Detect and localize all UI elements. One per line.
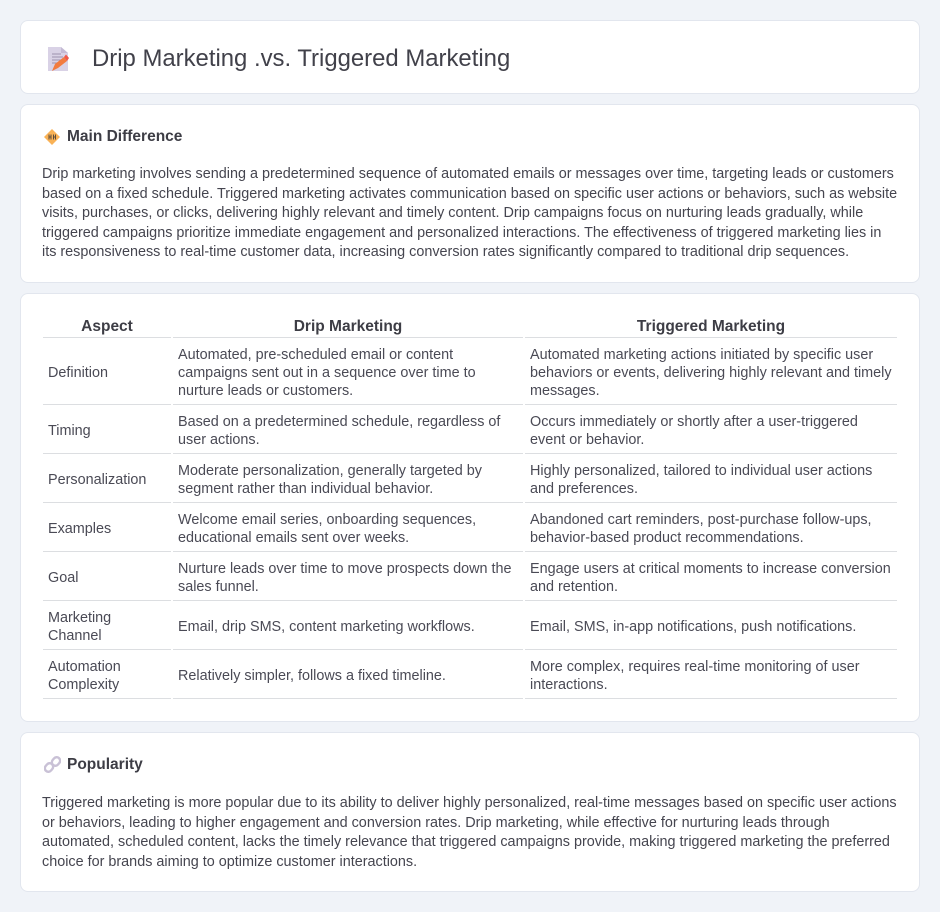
row: automation complexity: Automation (48, 658, 121, 674)
table header: Aspect (81, 318, 133, 335)
row: timing: Occurs immediately or shortly after a user-triggered (530, 414, 858, 430)
table header: Triggered Marketing (637, 318, 785, 335)
row: examples: educational emails sent over weeks. (178, 530, 409, 546)
row: automation complexity: More complex, requires real-time monitoring of user (530, 658, 860, 674)
row: marketing channel (43, 610, 897, 650)
row: personalization: and preferences. (530, 480, 638, 496)
heading: popularity: Popularity (67, 756, 143, 773)
text block: popularity: automated, scheduled content, lacks the timely relevance that triggered campaigns provide, making triggered marketing the preferred (42, 834, 890, 850)
panel: comparison table (20, 293, 920, 722)
row: examples: Abandoned cart reminders, post-purchase follow-ups, (530, 512, 872, 528)
row: definition (43, 346, 897, 405)
text block: popularity: or behaviors, leading to higher engagement and conversion rates. Drip marketing, while effective for nurturing leads through (42, 814, 830, 830)
row: goal: Nurture leads over time to move prospects down the (178, 560, 512, 576)
row: personalization: segment rather than individual behavior. (178, 480, 433, 496)
row: marketing channel: Channel (48, 628, 102, 644)
row: goal: Goal (48, 570, 78, 586)
row: definition: campaigns sent out in a sequence over time to (178, 364, 476, 380)
row: goal (43, 560, 897, 601)
row: examples: Examples (48, 520, 111, 536)
row: automation complexity: Complexity (48, 676, 119, 692)
row: automation complexity (43, 658, 897, 699)
row: timing (43, 414, 897, 454)
row: personalization (43, 462, 897, 503)
icon: orange diamond (44, 129, 60, 145)
table header (43, 318, 897, 338)
row: definition: Automated marketing actions initiated by specific user (530, 346, 873, 362)
row: goal: Engage users at critical moments to increase conversion (530, 560, 891, 576)
icon: chain link (44, 756, 61, 773)
text block: popularity: choice for brands aiming to optimize customer interactions. (42, 854, 417, 870)
row: goal: sales funnel. (178, 578, 259, 594)
row: timing: event or behavior. (530, 432, 644, 448)
text block: main difference: visits, purchases, or clicks, delivering highly relevant and timely content. Drip campaigns focus on nurturing leads gradually, while (42, 205, 863, 221)
text block: main difference: triggered campaigns prioritize immediate engagement and personalized interactions. The effectiveness of triggered marketing lies in (42, 224, 881, 240)
row: definition: nurture leads or customers. (178, 382, 353, 398)
row: definition: behaviors or events, delivering highly relevant and timely (530, 364, 892, 380)
row: examples (43, 512, 897, 552)
row: examples: Welcome email series, onboarding sequences, (178, 512, 476, 528)
row: marketing channel: Email, SMS, in-app notifications, push notifications. (530, 618, 856, 634)
text block: main difference: based on a fixed schedule. Triggered marketing activates communication based on specific user actions or behaviors, such as website (42, 186, 897, 202)
row: examples: behavior-based product recommendations. (530, 530, 804, 546)
row: automation complexity: interactions. (530, 676, 608, 692)
panel: main difference (20, 104, 920, 283)
row: goal: and retention. (530, 578, 618, 594)
row: definition: Definition (48, 364, 108, 380)
text block: main difference: its responsiveness to real-time customer data, increasing conversion rates significantly compared to traditional drip sequences. (42, 244, 849, 260)
text block: popularity (42, 795, 897, 870)
row: personalization: Moderate personalization, generally targeted by (178, 462, 482, 478)
heading: main difference: Main Difference (67, 128, 182, 145)
row: definition: messages. (530, 382, 600, 398)
text block: popularity: Triggered marketing is more popular due to its ability to deliver highly personalized, real-time messages based on specific user actions (42, 795, 897, 811)
row: timing: user actions. (178, 432, 260, 448)
icon: document with pencil (48, 47, 69, 71)
row: personalization: Personalization (48, 472, 146, 488)
row: timing: Timing (48, 422, 91, 438)
row: marketing channel: Marketing (48, 610, 111, 626)
row: automation complexity: Relatively simpler, follows a fixed timeline. (178, 668, 446, 684)
panel: popularity (20, 732, 920, 892)
row: marketing channel: Email, drip SMS, content marketing workflows. (178, 618, 475, 634)
row: definition: Automated, pre-scheduled email or content (178, 346, 453, 362)
table header: Drip Marketing (294, 318, 402, 335)
text block: main difference: Drip marketing involves sending a predetermined sequence of automated emails or messages over time, targeting leads or customers (42, 166, 894, 182)
header panel (20, 20, 920, 94)
row: personalization: Highly personalized, tailored to individual user actions (530, 462, 872, 478)
row: timing: Based on a predetermined schedule, regardless of (178, 414, 500, 430)
title: Drip Marketing .vs. Triggered Marketing (92, 45, 510, 72)
text block: main difference (42, 166, 897, 260)
